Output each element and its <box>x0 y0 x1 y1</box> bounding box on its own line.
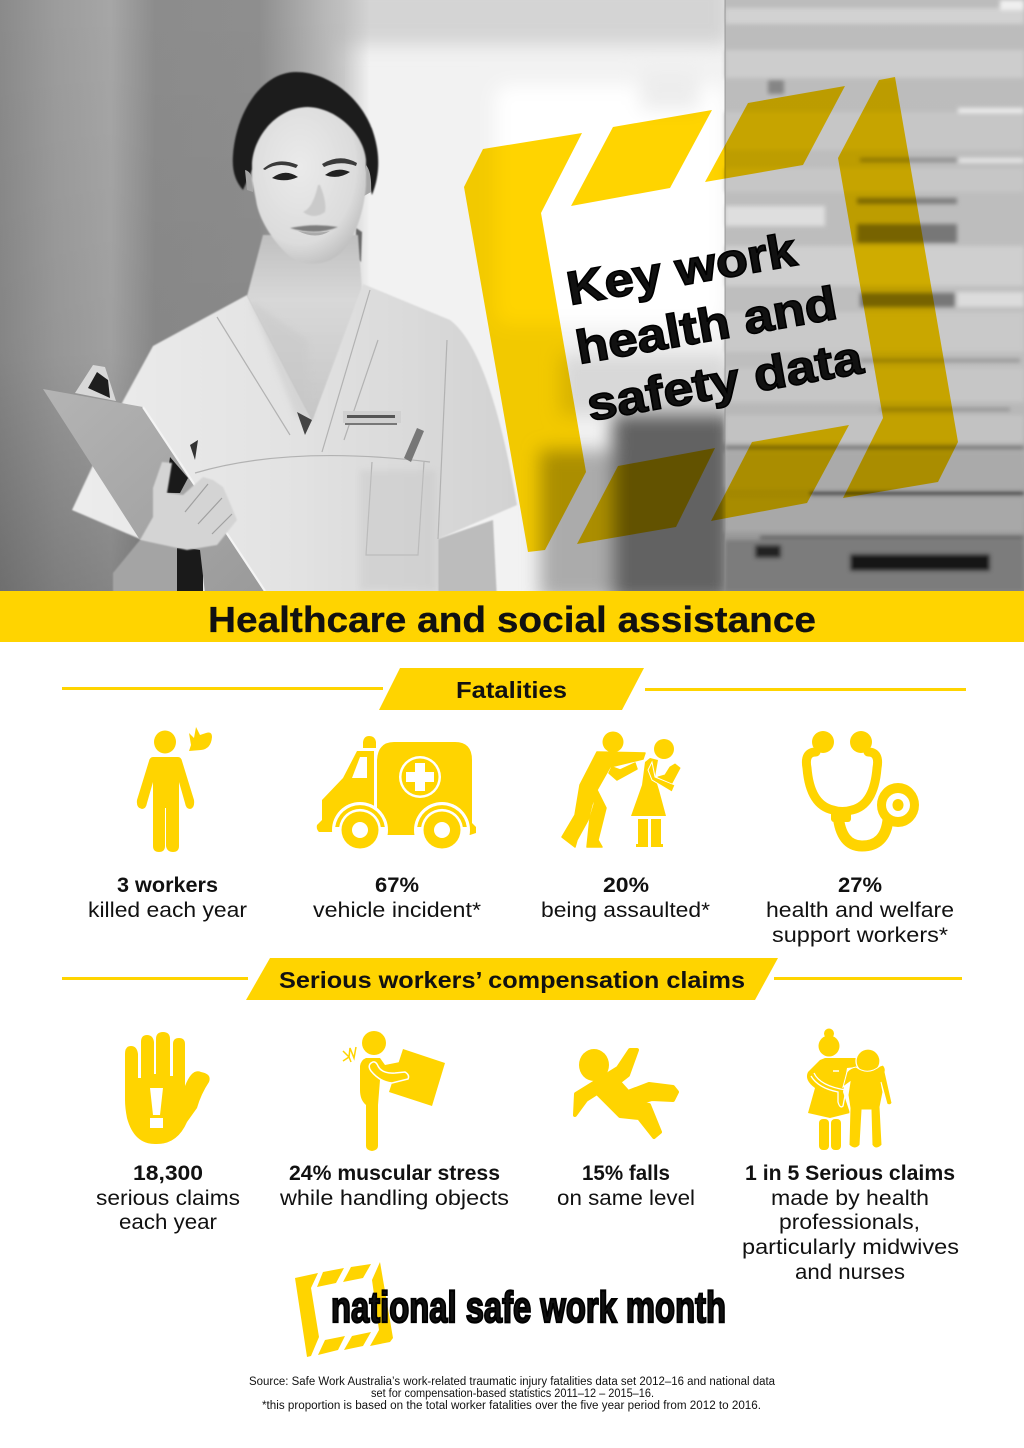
source note: *this proportion is based on the total worker fatalities over the five year period from 2012 to 2016. <box>262 1400 761 1412</box>
top segments <box>571 110 712 206</box>
stat: 67% vehicle incident: 67% <box>375 874 419 897</box>
nurse figure <box>43 72 517 600</box>
logo: national safe work month <box>295 1262 726 1357</box>
eyebrows and eyes <box>263 158 357 170</box>
icon: ambulance <box>317 736 476 858</box>
phone in hand <box>165 457 188 493</box>
stat: 1 in 5 serious claims by health professionals: made by health <box>771 1187 929 1210</box>
bottom segments <box>577 448 715 544</box>
section heading: Fatalities <box>62 668 966 710</box>
left bracket <box>464 133 586 552</box>
stat: 1 in 5 serious claims by health professionals: particularly midwives <box>742 1236 959 1259</box>
icon: assault <box>562 732 680 847</box>
source note: set for compensation-based statistics 2011–12 – 2015–16. <box>371 1388 654 1400</box>
stat: 1 in 5 serious claims by health professionals: professionals, <box>779 1211 920 1234</box>
icon: worker lifting box with muscular stress <box>343 1031 445 1151</box>
stat: 3 workers killed each year: killed each year <box>88 899 247 922</box>
stat: 15% falls on same level <box>557 1162 695 1210</box>
stat: 20% being assaulted: 20% <box>603 874 649 897</box>
stat: 20% being assaulted: being assaulted* <box>541 899 710 922</box>
stat: 24% muscular stress while handling objects <box>279 1162 509 1210</box>
frosted glass stripes <box>725 0 1024 591</box>
stat: 3 workers killed each year: 3 workers <box>117 874 218 897</box>
icon: nurse supporting patient <box>807 1028 892 1150</box>
right bracket <box>838 77 958 498</box>
pens <box>404 428 424 462</box>
main title: Key work health and safety data: health and <box>572 276 841 374</box>
hand <box>140 462 237 550</box>
stat: 18,300 serious claims each year: each year <box>119 1211 217 1234</box>
stat: 18,300 serious claims each year <box>96 1162 240 1234</box>
stat: 67% vehicle incident: vehicle incident* <box>313 899 481 922</box>
yellow bracket frame graphic <box>464 77 958 552</box>
stat: 18,300 serious claims each year: 18,300 <box>133 1162 203 1185</box>
name badge <box>343 411 401 423</box>
section heading: Fatalities: Fatalities <box>456 677 567 703</box>
stat: 20% being assaulted <box>541 874 710 922</box>
stat: 1 in 5 serious claims by health professionals: 1 in 5 Serious claims <box>745 1162 955 1185</box>
clipboard <box>43 389 265 593</box>
main title: Key work health and safety data <box>563 222 867 431</box>
section heading: Serious workers' compensation claims <box>62 958 962 1000</box>
icon: raised hand with exclamation mark <box>125 1032 210 1144</box>
face <box>252 107 366 264</box>
logo: national safe work month: national safe work month <box>331 1283 726 1332</box>
stat: 27% health and welfare support workers: support workers* <box>772 924 948 947</box>
hair wisp <box>356 228 362 262</box>
clipboard clip <box>75 365 116 401</box>
stat: 3 workers killed each year <box>88 874 247 922</box>
stat: 27% health and welfare support workers: health and welfare <box>766 899 954 922</box>
scrub collar seams <box>195 290 447 555</box>
stat: 15% falls on same level: 15% falls <box>582 1162 670 1185</box>
clothes body <box>72 284 517 600</box>
section heading: Serious workers' compensation claims: Serious workers’ compensation claims <box>279 967 745 993</box>
main title: Key work health and safety data: Key work <box>563 222 801 315</box>
source note: Source: Safe Work Australia’s work-related traumatic injury fatalities data set 2012–16 and national data <box>249 1376 776 1388</box>
source note <box>249 1376 776 1412</box>
banner: Healthcare and social assistance: Healthcare and social assistance <box>208 599 816 640</box>
stat: 1 in 5 serious claims by health professionals <box>742 1162 959 1284</box>
stat: 67% vehicle incident <box>313 874 481 922</box>
arms <box>438 520 497 600</box>
stat: 27% health and welfare support workers: 27% <box>838 874 882 897</box>
ear <box>245 165 371 196</box>
stat: 15% falls on same level: on same level <box>557 1187 695 1210</box>
stat: 24% muscular stress while handling objects: while handling objects <box>279 1187 509 1210</box>
icon: person falling <box>575 1049 677 1137</box>
stat: 1 in 5 serious claims by health professionals: and nurses <box>795 1261 905 1284</box>
banner: Healthcare and social assistance <box>0 591 1024 642</box>
main title: Key work health and safety data: safety data <box>583 330 867 431</box>
hair back <box>233 72 378 195</box>
stat: 24% muscular stress while handling objects: 24% muscular stress <box>289 1162 500 1185</box>
hero photo: nurse holding clipboard in corridor <box>0 0 1024 602</box>
nose shadow and mouth <box>303 185 325 216</box>
neck <box>247 235 362 420</box>
icon: stethoscope <box>806 731 919 846</box>
blurred corridor background <box>0 0 1024 602</box>
stat: 27% health and welfare support workers <box>766 874 954 947</box>
icon: worker with dove <box>137 727 212 852</box>
stat: 18,300 serious claims each year: serious claims <box>96 1187 240 1210</box>
